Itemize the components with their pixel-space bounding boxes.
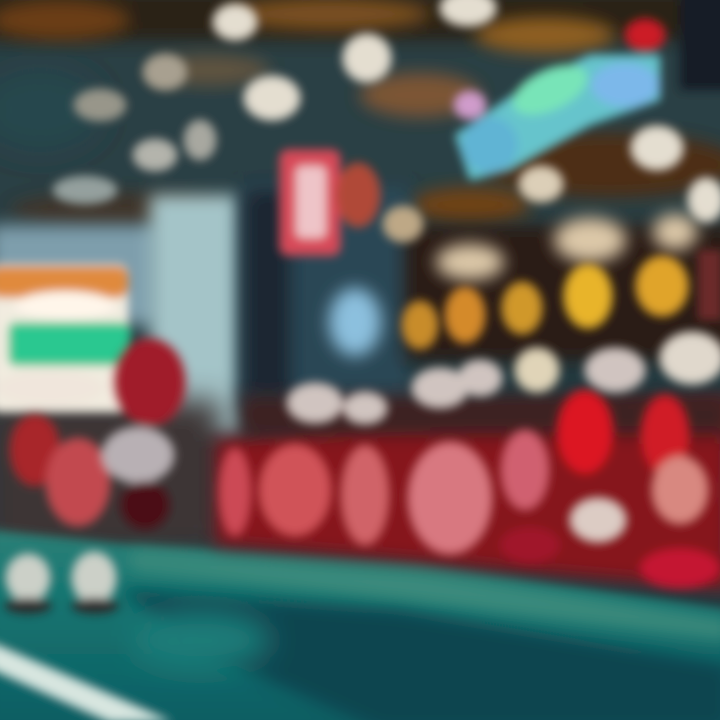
- white court line: [0, 642, 172, 720]
- left scoreboard sign: [0, 264, 130, 412]
- player in red next to sign: [4, 338, 186, 614]
- white caps upper row: [436, 214, 697, 280]
- yellow shirts row: [402, 250, 720, 349]
- colourful banner top right: [454, 19, 665, 180]
- ceiling lights: [53, 0, 720, 242]
- back wall: [0, 185, 720, 550]
- hanging red and white flag: [280, 150, 380, 255]
- teal court floor: [0, 530, 720, 720]
- blue wall light: [329, 288, 381, 356]
- team in red uniforms: [215, 332, 720, 590]
- ceiling background: [0, 0, 720, 240]
